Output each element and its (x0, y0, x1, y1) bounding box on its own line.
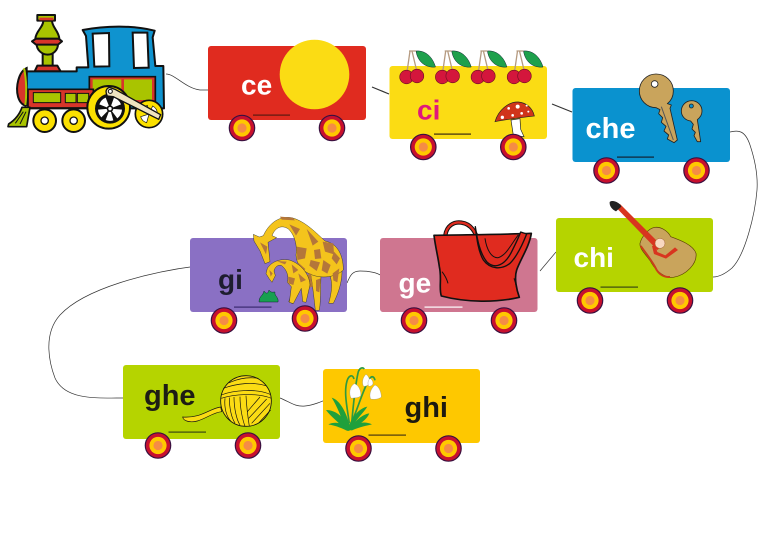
wagon body (572, 88, 730, 162)
wagon body (556, 218, 713, 292)
icon: shrub (259, 290, 278, 302)
wagon: ghe (123, 365, 280, 458)
wagon: ghi (323, 368, 480, 461)
word: che: che (586, 113, 635, 145)
wagon body (190, 238, 347, 312)
wagon: che (572, 74, 730, 183)
boiler and cab (27, 27, 164, 108)
wheels (577, 288, 693, 313)
cowcatcher (8, 107, 30, 127)
smokestack (32, 15, 62, 71)
icon: snowdrops (326, 368, 381, 431)
word: ge: ge (398, 268, 431, 298)
icon: yellow circle (280, 40, 349, 109)
wagon: ce (208, 40, 366, 141)
wagon body (380, 238, 538, 312)
wagon body (208, 46, 366, 120)
icon: mushroom (495, 102, 534, 137)
wheels (401, 308, 517, 333)
icon: guitar (610, 201, 696, 277)
wheels (346, 436, 461, 461)
icon: giraffes (253, 217, 343, 310)
icon: red bag (434, 222, 531, 301)
piston rod (106, 87, 161, 119)
icon: ball of yarn (183, 376, 271, 426)
icon: keys (639, 74, 702, 143)
wheels (594, 158, 709, 183)
baby giraffe (266, 260, 310, 304)
wheels (145, 433, 261, 458)
wagon body (323, 369, 480, 443)
word: ce: ce (241, 70, 272, 100)
rear wheel (135, 100, 163, 128)
wheels (411, 134, 526, 160)
cab windows (93, 33, 109, 67)
wagon: gi (190, 217, 347, 333)
cab panel (89, 77, 155, 103)
answer line (434, 134, 471, 135)
wheels (229, 115, 345, 141)
side panels (28, 89, 93, 108)
big giraffe neck and body (253, 217, 343, 277)
wagon body (123, 365, 280, 439)
connecting strings (49, 74, 757, 406)
answer line (600, 286, 638, 288)
answer line (168, 432, 206, 433)
small wheels (33, 109, 85, 132)
word: gi: gi (218, 264, 243, 295)
large wheel (87, 86, 130, 129)
answer line (617, 156, 654, 158)
wagon: ci (390, 51, 547, 160)
front cap (17, 68, 27, 105)
wagon: chi (556, 201, 713, 313)
wagon body (390, 66, 547, 139)
answer line (234, 306, 272, 308)
wagon: ge (380, 222, 538, 333)
word: ghe: ghe (144, 380, 196, 412)
big giraffe legs (289, 265, 306, 304)
word: ghi: ghi (404, 392, 448, 424)
answer line (424, 306, 462, 308)
icon: cherries (400, 51, 543, 84)
locomotive (8, 15, 164, 132)
wheels (211, 306, 318, 333)
word: chi: chi (574, 242, 614, 273)
answer line (253, 114, 290, 116)
answer line (368, 434, 406, 436)
word: ci: ci (417, 94, 440, 126)
